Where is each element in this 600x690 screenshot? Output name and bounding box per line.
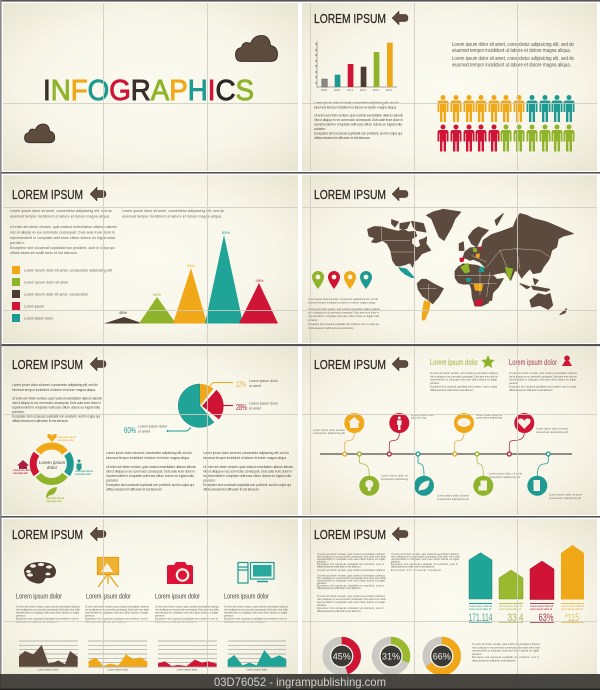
column 1: Lorem ipsum dolor xyxy=(16,592,62,600)
text block right: Lorem ipsum dolor sit amet, consectetur adipisicing elit, sed do xyxy=(452,42,574,48)
timeline labels: consectetur adipisicing xyxy=(381,478,409,481)
column 3: pariatur. xyxy=(155,614,165,618)
panel: timeline xyxy=(302,347,597,515)
text block red: nisi ut aliquip ex ea commodo consequat. Duis aute irure dolor in xyxy=(509,375,578,378)
cycle diagram xyxy=(13,434,93,503)
timeline labels: consectetur adipisicing elit xyxy=(536,431,568,434)
text block: eiusmod tempor incididunt ut labore et dolore magna aliqua. xyxy=(308,302,376,304)
text column 2: reprehenderit in voluptate velit esse cillum dolore eu fugiat nulla xyxy=(106,474,194,478)
panel: arrows and donuts xyxy=(302,519,597,690)
column 1: Ut enim ad minim veniam, quis nostrud exercitation ullamco xyxy=(16,606,81,608)
text block: nisi ut aliquip ex ea commodo consequat. Duis aute irure dolor in xyxy=(308,312,380,314)
stat: 115: Lorem ipsum dolor sit xyxy=(561,607,583,611)
text column 1: Excepteur sint occaecat cupidatat non proident, sunt in xyxy=(317,607,385,610)
stat: 63%: Lorem ipsum dolor sit xyxy=(530,607,552,611)
column 4: officia deserunt mollit anim id est laborum. xyxy=(224,620,266,624)
column 2: Excepteur sint occaecat cupidatat non proident, sunt in xyxy=(85,618,149,620)
text block xyxy=(10,209,117,255)
text block bottom: officia deserunt mollit anim id est laborum. xyxy=(472,660,516,662)
text column 3: officia deserunt mollit anim id est laborum. xyxy=(203,488,260,492)
panel: pie and cycle xyxy=(3,347,298,515)
text column 2: Excepteur sint occaecat cupidatat non proident, sunt in culpa qui xyxy=(106,483,194,487)
bar chart xyxy=(315,41,397,92)
column 3: Lorem ipsum dolor xyxy=(155,592,200,600)
stat: 115 xyxy=(561,604,584,624)
legend: Lorem ipsum dolor sit amet xyxy=(24,280,68,284)
callout: 28%: 28% xyxy=(236,403,247,412)
column 4: Excepteur sint occaecat cupidatat non proident, sunt in xyxy=(224,618,288,620)
triangle chart: 45% xyxy=(255,278,264,283)
donut: 31%: 31% xyxy=(382,652,400,662)
callout: 60%: ut amet xyxy=(138,430,150,434)
donut: 66% xyxy=(426,640,457,672)
text block: officia deserunt mollit anim id est laborum. xyxy=(12,419,69,423)
panel: triangle chart xyxy=(3,175,298,343)
legend xyxy=(12,266,112,322)
text block: Excepteur sint occaecat cupidatat non proident, sunt in culpa qui xyxy=(314,132,402,136)
text block: Ut enim ad minim veniam, quis nostrud exercitation ullamco laboris xyxy=(308,308,381,311)
timeline labels: Lorem ipsum dolor sit amet xyxy=(313,429,345,432)
text block: reprehenderit in voluptate velit esse cillum dolore eu fugiat nulla xyxy=(314,122,402,126)
arrow xyxy=(90,357,106,371)
cycle diagram: Lorem ipsum dolor sit xyxy=(57,436,76,439)
text block: Lorem ipsum dolor sit amet, consectetur adipisicing elit, sed do xyxy=(308,298,379,301)
timeline labels: adipisicing xyxy=(411,416,427,420)
column 2 xyxy=(85,592,150,672)
text block bottom: nisi ut aliquip ex ea commodo consequat. Duis aute irure dolor xyxy=(472,646,540,649)
icon: speech node xyxy=(454,413,474,433)
panel: icons and area charts xyxy=(3,519,298,690)
arrow xyxy=(392,527,408,541)
text column 1: reprehenderit in voluptate velit esse cillum dolore eu fugiat xyxy=(317,580,385,582)
icon: person node xyxy=(389,413,409,433)
triangle chart: 65% xyxy=(187,263,195,268)
callout: 12%: 12% xyxy=(236,380,246,389)
column 2: Lorem ipsum dolor xyxy=(86,592,131,600)
text block red: pariatur. xyxy=(509,382,519,385)
text block: Lorem ipsum dolor sit amet, consectetur adipisicing elit, sed do xyxy=(12,383,98,387)
callout: 60% xyxy=(124,424,191,435)
callout: 12%: ut amet xyxy=(249,384,261,388)
icon: computer xyxy=(238,562,274,583)
stat: 33.4: Lorem ipsum dolor sit xyxy=(499,607,521,611)
timeline labels: Lorem ipsum dolor sit xyxy=(476,414,502,417)
text block: reprehenderit in voluptate velit esse cillum dolore eu fugiat nulla xyxy=(12,406,100,410)
map pins xyxy=(312,271,372,289)
text block right xyxy=(452,42,574,68)
text column 1: pariatur. xyxy=(317,560,327,564)
people pictogram xyxy=(438,95,574,152)
text block: Excepteur sint occaecat cupidatat non proident, sunt in culpa qui xyxy=(308,323,379,326)
world map xyxy=(368,209,573,320)
icon: large cloud xyxy=(236,36,278,62)
text column 2: pariatur. xyxy=(106,478,119,482)
text block green: officia deserunt mollit anim id est laborum. xyxy=(430,389,474,392)
text column 1: Ut enim ad minim veniam, quis nostrud exercitation ullamco xyxy=(317,574,386,578)
text column 2: Excepteur sint occaecat cupidatat xyxy=(391,569,441,572)
column 1: officia deserunt mollit anim id est laborum. xyxy=(16,620,58,624)
text column 1: nisi ut aliquip ex ea commodo consequat. Duis aute irure dolor xyxy=(317,556,386,558)
text column 2: Excepteur sint occaecat cupidatat non proident, sunt in xyxy=(391,563,459,566)
callout: 12% xyxy=(210,379,279,389)
timeline labels: consectetur adipisicing elit xyxy=(549,497,581,500)
heading: LOREM IPSUM xyxy=(12,187,83,202)
text block: officia deserunt mollit anim id est laborum. xyxy=(314,136,371,140)
text block: Ut enim ad minim veniam, quis nostrud exercitation ullamco laboris xyxy=(10,225,117,229)
text block bottom: Ut enim ad minim veniam, quis nostrud exercitation ullamco xyxy=(472,643,541,646)
icon: leaf xyxy=(46,487,57,498)
column 3: Ut enim ad minim veniam, quis nostrud exercitation ullamco xyxy=(155,606,220,608)
icon: palette xyxy=(24,562,56,584)
column 3: reprehenderit in voluptate velit esse cillum dolore eu fugiat xyxy=(155,612,218,614)
text column 2: pariatur. xyxy=(391,560,401,564)
text block green: Ut enim ad minim veniam, quis nostrud exercitation ullamco xyxy=(430,372,499,375)
text block xyxy=(314,101,403,140)
timeline labels: Lorem ipsum dolor sit amet xyxy=(489,472,522,476)
text block green xyxy=(430,372,499,392)
text block column 2: eiusmod tempor incididunt ut labore et dolore magna aliqua. xyxy=(122,214,222,218)
panel: cover xyxy=(3,3,298,171)
text column 1: Excepteur sint occaecat cupidatat non proident, sunt in xyxy=(317,584,385,588)
heading: LOREM IPSUM xyxy=(314,187,386,202)
icon: fuel node xyxy=(527,476,547,496)
donut: 31% xyxy=(376,640,406,672)
stat: 33.4: Lorem ipsum dolor sit xyxy=(499,604,522,608)
panel: bar chart and people xyxy=(302,3,597,171)
icon: easel xyxy=(98,558,118,587)
text column 1: Ut enim ad minim veniam, quis nostrud exercitation ullamco xyxy=(317,595,386,598)
text block red: Ut enim ad minim veniam, quis nostrud exercitation ullamco xyxy=(509,372,578,375)
legend: Lorem ipsum dolor sit amet, consectetur xyxy=(24,292,89,296)
stat: 33.4 xyxy=(499,604,524,624)
column 4: Lorem ipsum dolor xyxy=(224,592,269,600)
text column 2: Ut enim ad minim veniam, quis nostrud exercitation ullamco laboris xyxy=(106,465,196,469)
text column 1: Excepteur sint occaecat cupidatat non proident, sunt in xyxy=(317,563,385,566)
column 2: pariatur. xyxy=(85,614,95,618)
cycle diagram: Lorem ipsum xyxy=(39,460,65,465)
triangle chart xyxy=(104,230,278,324)
text column 3: Excepteur sint occaecat cupidatat non proident, sunt in culpa qui xyxy=(203,483,291,487)
text block red xyxy=(509,372,578,392)
column 1: nisi ut aliquip ex ea commodo consequat. Duis aute irure dolor xyxy=(16,608,80,612)
arrow bar chart xyxy=(468,545,584,624)
timeline labels: consectetur adipisicing elit xyxy=(489,476,520,479)
text block red: Excepteur sint occaecat cupidatat non proident, sunt in culpa xyxy=(509,386,577,388)
bar chart: 2013 xyxy=(373,89,380,92)
cycle diagram: Lorem ipsum dolor xyxy=(57,439,74,442)
pie chart xyxy=(178,384,224,427)
text column 1: officia deserunt mollit anim id est laborum. xyxy=(317,566,361,568)
text column 1: Ut enim ad minim veniam, quis nostrud exercitation ullamco xyxy=(317,553,386,556)
text column 1: reprehenderit in voluptate velit esse cillum dolore eu fugiat xyxy=(317,558,385,561)
icon: person xyxy=(76,460,82,470)
icon: house xyxy=(17,460,29,469)
column 2: nisi ut aliquip ex ea commodo consequat. Duis aute irure dolor xyxy=(85,608,149,612)
timeline labels: Lorem ipsum dolor sit xyxy=(381,474,408,478)
area chart orange: Lorem ipsum dolor xyxy=(108,668,129,672)
red subheading with figure: Lorem ipsum dolor xyxy=(509,358,557,367)
icon: camera xyxy=(167,562,193,584)
text block: pariatur. xyxy=(308,319,318,322)
text block: nisi ut aliquip ex ea commodo consequat. Duis aute irure dolor in xyxy=(12,401,101,405)
arrow xyxy=(392,187,408,201)
text column 1: nisi ut aliquip ex ea commodo consequat. Duis aute irure dolor xyxy=(317,577,386,580)
text block: eiusmod tempor incididunt ut labore et dolore magna aliqua. xyxy=(314,106,397,110)
text block: eiusmod tempor incididunt ut labore et dolore magna aliqua. xyxy=(12,388,96,392)
bar chart: 2011 xyxy=(347,89,354,92)
text block: nisi ut aliquip ex ea commodo consequat. Duis aute irure dolor in xyxy=(314,118,403,122)
icon: leaf node xyxy=(414,476,434,496)
cycle diagram: Lorem ipsum dolor sit xyxy=(13,469,32,472)
column 1: pariatur. xyxy=(16,614,26,618)
cycle diagram: Lorem ipsum dolor xyxy=(46,500,62,503)
column 1: reprehenderit in voluptate velit esse cillum dolore eu fugiat xyxy=(16,612,79,614)
text column 1 xyxy=(317,553,386,613)
donut: 45% xyxy=(326,640,357,672)
text column 2: nisi ut aliquip ex ea commodo consequat. Duis aute irure dolor in xyxy=(106,470,195,474)
text column 2: eiusmod tempor incididunt ut labore et dolore magna aliqua. xyxy=(106,456,190,460)
stat: 171,114: Lorem ipsum dolor sit xyxy=(469,604,492,608)
text column 3: reprehenderit in voluptate velit esse cillum dolore eu fugiat nulla xyxy=(203,474,291,478)
callout: 28%: Lorem ipsum dolor xyxy=(249,402,279,406)
stat: 63% xyxy=(530,604,554,624)
timeline labels: Lorem ipsum dolor xyxy=(411,414,434,417)
timeline labels: Lorem ipsum dolor sit amet xyxy=(536,428,568,430)
text column 3: nisi ut aliquip ex ea commodo consequat. Duis aute irure dolor in xyxy=(203,470,292,474)
text block: reprehenderit in voluptate velit esse cillum dolore eu fugiat nulla xyxy=(308,315,380,318)
heading: LOREM IPSUM xyxy=(12,357,83,372)
text column 1: pariatur. xyxy=(317,604,327,607)
text column 2: nisi ut aliquip ex ea commodo consequat. Duis aute irure dolor xyxy=(391,556,460,558)
text block: Ut enim ad minim veniam, quis nostrud exercitation ullamco laboris xyxy=(12,396,102,400)
text column 1: reprehenderit in voluptate velit esse cillum dolore eu fugiat xyxy=(317,601,385,604)
cycle diagram: Lorem ipsum dolor sit xyxy=(46,497,64,500)
text block red: officia deserunt mollit anim id est laborum. xyxy=(509,389,553,392)
text column 2: Lorem ipsum dolor sit amet, consectetur adipisicing elit, sed do xyxy=(106,451,192,455)
arrow xyxy=(90,187,106,201)
column 3 xyxy=(155,592,220,672)
text column 2: reprehenderit in voluptate velit esse cillum dolore eu fugiat xyxy=(391,558,459,561)
timeline labels: consectetur adipisicing xyxy=(476,416,503,420)
timeline labels: consectetur adipisicing elit xyxy=(437,498,469,501)
bar chart: 2010 xyxy=(334,89,341,92)
green subheading with star xyxy=(430,355,495,368)
text block red: reprehenderit in voluptate velit esse cillum dolore eu fugiat xyxy=(509,379,576,382)
text column 1: Ut enim ad minim veniam, quis nostrud exercitation ullamco xyxy=(317,569,386,572)
arrow xyxy=(392,357,408,371)
stat: 115: *115 xyxy=(565,612,579,624)
text column 3: Ut enim ad minim veniam, quis nostrud exercitation ullamco laboris xyxy=(203,465,293,469)
cycle diagram: Lorem ipsum dolor xyxy=(75,473,91,476)
stat: 171,114 xyxy=(468,604,492,624)
text block: Excepteur sint occaecat cupidatat non proident, sunt in culpa qui xyxy=(10,246,115,250)
column 1 xyxy=(16,592,81,672)
timeline labels: Lorem ipsum dolor sit amet xyxy=(549,494,582,496)
text column 2: officia deserunt mollit anim id est laborum. xyxy=(106,488,163,492)
panel: world map xyxy=(302,175,597,343)
text block green: pariatur. xyxy=(430,382,440,385)
text block: Ut enim ad minim veniam, quis nostrud exercitation ullamco laboris xyxy=(314,114,403,118)
callout: 28%: ut amet xyxy=(249,406,261,410)
bar chart: 2012 xyxy=(360,89,367,92)
text column 3: Lorem ipsum dolor sit amet, consectetur adipisicing elit, sed do xyxy=(203,451,289,455)
text block right: eiusmod tempor incididunt ut labore et dolore magna aliqua. xyxy=(452,62,571,68)
callout: 60%: Lorem ipsum dolor xyxy=(138,424,168,428)
text block bottom xyxy=(472,643,541,662)
icon: heart node xyxy=(514,413,534,433)
text block: pariatur. xyxy=(314,127,326,131)
title: INFOGRAPHICS xyxy=(43,75,254,107)
stat: 33.4: 33.4 xyxy=(508,612,524,624)
text block column 2 xyxy=(122,209,224,218)
text column 2 xyxy=(391,553,460,572)
text block: Lorem ipsum dolor sit amet, consectetur adipisicing elit, sed do xyxy=(314,101,399,105)
column 2: Ut enim ad minim veniam, quis nostrud exercitation ullamco xyxy=(85,606,150,608)
stat: 63%: 63% xyxy=(538,612,554,624)
green subheading with star: Lorem ipsum dolor xyxy=(430,358,478,367)
donut: 66%: 66% xyxy=(433,652,451,662)
heading: LOREM IPSUM xyxy=(314,527,386,542)
stat: 171,114: 171,114 xyxy=(468,612,492,624)
area chart teal: Lorem ipsum dolor xyxy=(247,668,268,672)
stat: 115: Lorem ipsum dolor sit xyxy=(561,604,584,608)
text block: pariatur. xyxy=(12,410,25,414)
stat: 63%: Lorem ipsum dolor sit xyxy=(530,604,553,608)
text column 3: pariatur. xyxy=(203,478,216,482)
arrow xyxy=(392,11,408,25)
arrow xyxy=(90,527,106,541)
text column 1: pariatur. xyxy=(317,582,327,585)
column 2: officia deserunt mollit anim id est laborum. xyxy=(85,620,127,624)
triangle chart: 45% xyxy=(119,310,127,315)
icon: bulb node xyxy=(359,476,379,496)
stat: 171,114: Lorem ipsum dolor sit xyxy=(469,607,491,611)
watermark bar: 03D76052 - ingrampublishing.com xyxy=(214,675,386,689)
legend: Lorem ipsum xyxy=(24,304,44,308)
column 4: Ut enim ad minim veniam, quis nostrud exercitation ullamco xyxy=(224,606,289,608)
icon: heart xyxy=(47,434,57,442)
text block: nisi ut aliquip ex ea commodo consequat. Duis aute irure dolor in xyxy=(10,230,115,234)
column 3: nisi ut aliquip ex ea commodo consequat. Duis aute irure dolor xyxy=(155,608,219,612)
text block: officia deserunt mollit anim id est laborum. xyxy=(308,327,354,330)
text block xyxy=(12,383,102,423)
triangle chart: 85% xyxy=(222,230,230,235)
text column 2 xyxy=(106,451,196,492)
watermark bar xyxy=(0,674,600,690)
callout: 28% xyxy=(223,402,279,412)
text column 1: officia deserunt mollit anim id est laborum. xyxy=(317,587,361,590)
icon: small cloud xyxy=(24,124,55,143)
text block right: Lorem ipsum dolor sit amet, consectetur adipisicing elit, sed do xyxy=(452,56,574,62)
text block: pariatur. xyxy=(10,241,25,245)
text block bottom: Excepteur sint occaecat cupidatat non proident, sunt in xyxy=(472,656,540,659)
heading: LOREM IPSUM xyxy=(12,527,83,542)
legend: Lorem ipsum dolor xyxy=(24,316,54,320)
text column 2: Ut enim ad minim veniam, quis nostrud exercitation ullamco xyxy=(391,553,460,556)
cycle diagram: Lorem ipsum dolor sit xyxy=(75,470,93,473)
column 3: Excepteur sint occaecat cupidatat non proident, sunt in xyxy=(155,618,219,620)
callout: 12%: Lorem ipsum dolor xyxy=(249,379,279,383)
text block column 2: Lorem ipsum dolor sit amet, consectetur adipisicing elit, sed do xyxy=(122,209,224,213)
text column 3: eiusmod tempor incididunt ut labore et dolore magna aliqua. xyxy=(203,456,287,460)
text block right: eiusmod tempor incididunt ut labore et dolore magna aliqua. xyxy=(452,48,571,54)
text block: Lorem ipsum dolor sit amet, consectetur adipisicing elit, sed do xyxy=(10,209,112,213)
column 1: Excepteur sint occaecat cupidatat non proident, sunt in xyxy=(16,618,80,620)
legend: Lorem ipsum dolor sit amet, consectetur adipisicing elit xyxy=(24,268,112,272)
text block: reprehenderit in voluptate velit esse cillum dolore eu fugiat nulla xyxy=(10,236,115,240)
column 4: pariatur. xyxy=(224,614,234,618)
bar chart: 2014 xyxy=(386,89,393,92)
text block: officia deserunt mollit anim id est laborum. xyxy=(10,251,78,255)
text column 2: officia deserunt mollit anim id est laborum. xyxy=(391,566,435,568)
cycle diagram: Lorem ipsum dolor xyxy=(13,472,28,475)
text block green: Excepteur sint occaecat cupidatat non proident, sunt in culpa xyxy=(430,386,498,388)
callout: 60%: 60% xyxy=(124,426,136,435)
icon: house node xyxy=(344,413,364,433)
column 4: reprehenderit in voluptate velit esse cillum dolore eu fugiat xyxy=(224,612,287,614)
area chart brown: Lorem ipsum dolor xyxy=(38,668,59,672)
timeline labels: Lorem ipsum dolor sit amet xyxy=(437,494,469,498)
text block bottom: pariatur. xyxy=(472,653,482,656)
heading: LOREM IPSUM xyxy=(314,11,386,26)
text block green: reprehenderit in voluptate velit esse cillum dolore eu fugiat xyxy=(430,379,497,382)
text column 3 xyxy=(203,451,293,492)
area chart red: Lorem ipsum dolor xyxy=(177,668,198,672)
text block: Excepteur sint occaecat cupidatat non proident, sunt in culpa qui xyxy=(12,414,100,418)
timeline labels xyxy=(313,414,582,501)
text column 1: officia deserunt mollit anim id est laborum. xyxy=(317,610,361,613)
text block green: nisi ut aliquip ex ea commodo consequat. Duis aute irure dolor in xyxy=(430,375,499,378)
timeline labels: consectetur adipisicing elit xyxy=(313,432,345,435)
text block bottom: reprehenderit in voluptate velit esse cillum dolore eu fugiat xyxy=(472,650,539,653)
column 4: nisi ut aliquip ex ea commodo consequat. Duis aute irure dolor xyxy=(224,608,288,612)
heading: LOREM IPSUM xyxy=(314,357,386,372)
triangle chart: 55% xyxy=(153,292,161,297)
column 2: reprehenderit in voluptate velit esse cillum dolore eu fugiat xyxy=(85,612,148,614)
icon: document node xyxy=(473,476,493,496)
donut: 45%: 45% xyxy=(333,652,351,662)
timeline chart xyxy=(313,413,582,501)
column 4 xyxy=(224,592,289,672)
text block: eiusmod tempor incididunt ut labore et dolore magna aliqua. xyxy=(10,214,110,218)
column 3: officia deserunt mollit anim id est laborum. xyxy=(155,620,197,624)
bar chart: 2009 xyxy=(321,89,328,92)
text block xyxy=(308,298,381,330)
cycle diagram: dolor xyxy=(47,465,58,470)
text column 1: nisi ut aliquip ex ea commodo consequat. Duis aute irure dolor xyxy=(317,598,386,601)
